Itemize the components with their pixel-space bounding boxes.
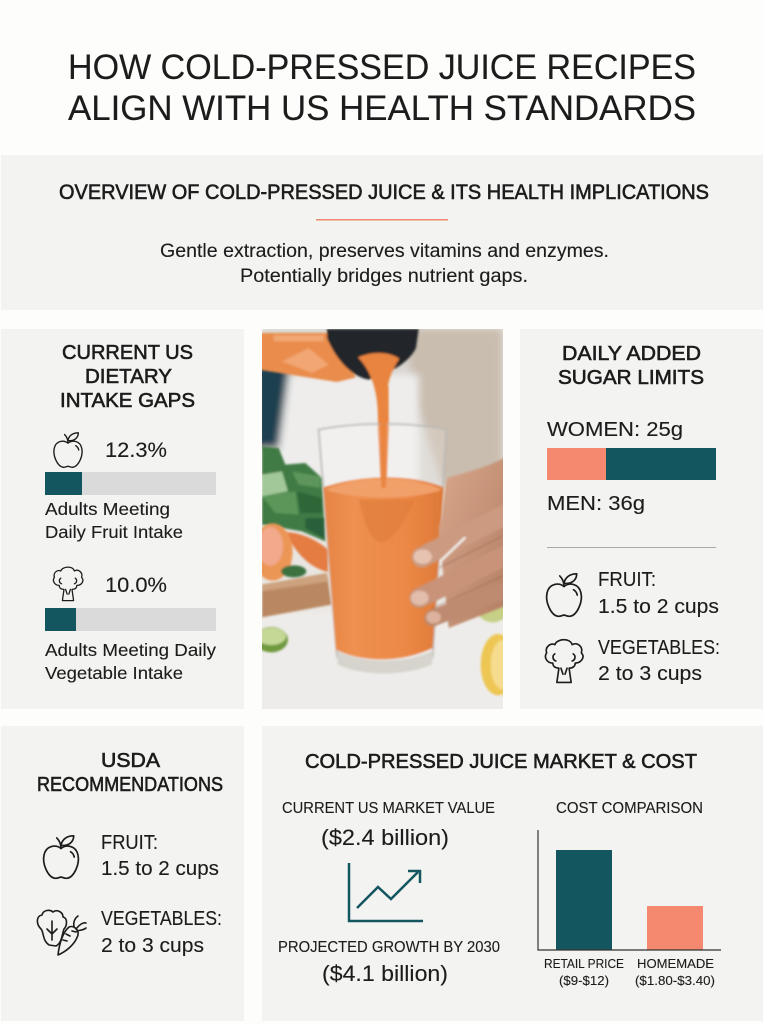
projected growth: PROJECTED GROWTH BY 2030: [278, 939, 500, 956]
sugar heading: [558, 342, 704, 389]
USDA heading: RECOMMENDATIONS: [37, 774, 223, 796]
overview text: Gentle extraction, preserves vitamins and enzymes.: [160, 241, 609, 262]
current market value: ($2.4 billion): [321, 825, 449, 850]
glass: [319, 386, 446, 673]
title: [68, 48, 696, 128]
icon: leafy greens and carrot: [37, 910, 86, 955]
sugar heading: SUGAR LIMITS: [558, 366, 704, 389]
hand: [411, 455, 509, 628]
title: HOW COLD-PRESSED JUICE RECIPES: [68, 48, 696, 87]
text: fruit: FRUIT:: [598, 569, 656, 591]
panel: current US dietary intake gaps: [1, 329, 244, 709]
stat: vegetable percent: 10.0%: [105, 574, 167, 597]
blurred background: [262, 329, 503, 621]
USDA heading: [37, 750, 223, 796]
sugar heading: DAILY ADDED: [562, 342, 701, 365]
text: vegetables: VEGETABLES:: [598, 637, 720, 659]
bottle: [259, 329, 419, 488]
text: fruit: FRUIT:: [101, 832, 158, 854]
current market value: [282, 800, 495, 850]
carrot, citrus and lime: [253, 523, 515, 695]
label: retail price: RETAIL PRICE: [544, 956, 624, 971]
icon: broccoli: [545, 640, 583, 682]
text: vegetables: 2 to 3 cups: [101, 935, 204, 957]
label: women: WOMEN: 25g: [547, 419, 683, 441]
bar chart: cost comparison: [538, 830, 721, 988]
icon: growth chart: [349, 863, 423, 921]
icon: broccoli: [53, 567, 83, 601]
panel: USDA recommendations: [1, 726, 244, 1021]
intake gaps heading: CURRENT US: [62, 341, 193, 364]
text: vegetables: 2 to 3 cups: [598, 663, 702, 685]
panel: market and cost: [262, 726, 763, 1021]
text: vegetables: [101, 908, 222, 957]
label: vegetable intake: [45, 640, 216, 683]
title: ALIGN WITH US HEALTH STANDARDS: [68, 89, 696, 128]
bar: vegetable intake: [45, 608, 216, 631]
label: vegetable intake: Vegetable Intake: [45, 663, 183, 683]
label: men: MEN: 36g: [547, 493, 645, 515]
intake gaps heading: [60, 341, 195, 412]
label: homemade: HOMEMADE: [637, 956, 714, 971]
label: fruit intake: [45, 499, 183, 542]
projected growth: [278, 939, 500, 986]
text: fruit: 1.5 to 2 cups: [598, 596, 719, 618]
text: fruit: 1.5 to 2 cups: [101, 858, 219, 880]
text: vegetables: VEGETABLES:: [101, 908, 222, 930]
panel: overview: [1, 155, 763, 310]
cost comparison heading: COST COMPARISON: [556, 800, 703, 817]
projected growth: ($4.1 billion): [322, 961, 448, 986]
label: fruit intake: Adults Meeting: [45, 499, 170, 519]
icon: apple: [547, 574, 581, 616]
leafy greens: [262, 446, 325, 541]
label: homemade: [635, 956, 715, 988]
icon: apple: [44, 836, 78, 878]
market heading: COLD-PRESSED JUICE MARKET & COST: [305, 750, 697, 773]
bar: fruit intake: [45, 472, 216, 495]
label: retail price: ($9-$12): [559, 973, 609, 988]
overview heading: OVERVIEW OF COLD-PRESSED JUICE & ITS HEALTH IMPLICATIONS: [59, 181, 709, 204]
label: vegetable intake: Adults Meeting Daily: [45, 640, 216, 660]
current market value: CURRENT US MARKET VALUE: [282, 800, 495, 817]
text: vegetables: [598, 637, 720, 685]
panel: daily added sugar limits: [520, 329, 763, 709]
USDA heading: USDA: [101, 750, 161, 772]
icon: apple: [54, 433, 82, 467]
stat: fruit percent: 12.3%: [105, 439, 167, 462]
intake gaps heading: INTAKE GAPS: [60, 389, 195, 412]
photo: juice poured into glass: [253, 328, 515, 715]
label: homemade: ($1.80-$3.40): [635, 973, 715, 988]
overview text: [160, 241, 609, 287]
cutting board: [262, 573, 331, 617]
text: fruit: [101, 832, 219, 880]
intake gaps heading: DIETARY: [85, 365, 172, 388]
label: fruit intake: Daily Fruit Intake: [45, 522, 183, 542]
text: fruit: [598, 569, 719, 618]
overview text: Potentially bridges nutrient gaps.: [240, 266, 528, 287]
bar: sugar limits: [547, 448, 716, 480]
label: retail price: [544, 956, 624, 988]
